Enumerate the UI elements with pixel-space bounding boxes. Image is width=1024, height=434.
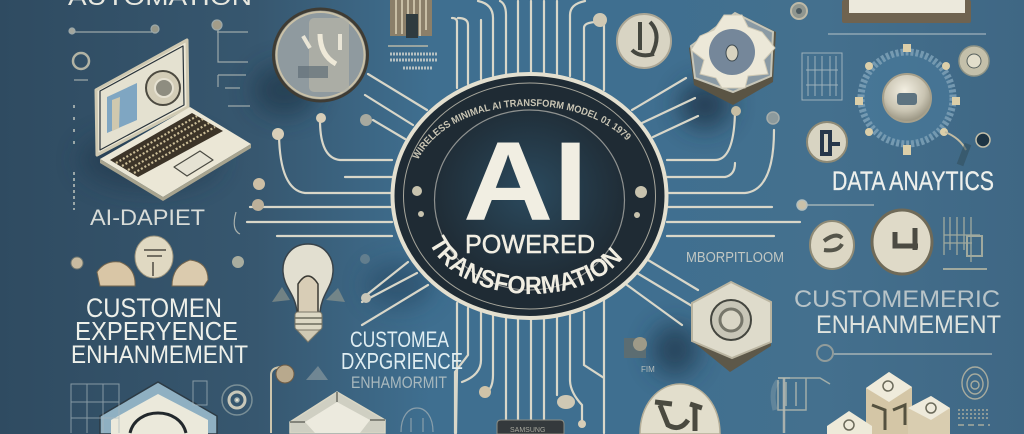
label: mborpitloom: MBORPITLOOM (686, 249, 784, 266)
icon: top seal (617, 14, 671, 68)
icon: bottom left hexagon (100, 382, 217, 434)
icon: lower center sketch (401, 408, 433, 432)
icon: sketch panel (778, 378, 830, 410)
sketch connector right (767, 112, 874, 210)
icon: building sketch (388, 0, 438, 68)
text: customer experience left (71, 293, 248, 369)
icon: top right panel (842, 0, 971, 23)
icon: spiral emblem (958, 367, 990, 425)
icon: camera sketch (624, 337, 655, 374)
badge ring microtext: WIRELESS MINIMAL AI TRANSFORM MODEL 01 1979 (412, 99, 631, 158)
sketch marks near laptop (69, 20, 250, 210)
icon: laptop (96, 40, 251, 201)
icon: bottom seal (640, 384, 720, 434)
text: customer enhancement right (794, 286, 1001, 339)
icon: small ring left (222, 385, 252, 415)
line: customea: CUSTOMEA (350, 327, 449, 352)
heading: ai-driven: AI-DAPIET (90, 205, 205, 230)
icon: bottom center cube (290, 392, 385, 433)
icon: chip (497, 420, 564, 434)
icon: chip: SAMSUNG (510, 427, 545, 434)
powered label: POWERED (465, 229, 595, 259)
icon: clock dial (274, 9, 368, 101)
divider line and small knob (791, 3, 986, 34)
icon: hook connector (271, 365, 328, 433)
icon: grid sketch left (71, 381, 207, 433)
icon: small circle right (810, 221, 854, 269)
icon: camera sketch: FIM (641, 365, 655, 374)
icon: circular data diagram (855, 44, 990, 165)
ai heading: AI (463, 119, 588, 244)
line: customen: CUSTOMEN (86, 293, 222, 323)
icon: data sketch (943, 217, 987, 269)
icon: small button (959, 46, 989, 76)
badge ring icons (412, 186, 647, 218)
central badge (390, 72, 668, 320)
text: customer experience middle (341, 327, 463, 392)
icon: stacked cubes (827, 372, 950, 434)
transformation label: TRANSFORMATION (432, 234, 622, 294)
line: dxpgrience: DXPGRIENCE (341, 348, 463, 374)
line: enhanmement: ENHANMEMENT (71, 341, 248, 369)
icon: light bulb (272, 244, 370, 342)
line: experyence: EXPERYENCE (75, 316, 238, 346)
line: enhamormit: ENHAMORMIT (351, 373, 447, 392)
soft shadows (80, 64, 731, 376)
icon: three lumps (71, 212, 244, 286)
line: enhanmement right: ENHANMEMENT (816, 311, 1001, 339)
icon: grid chart (802, 53, 842, 100)
icon: large circle right (872, 210, 932, 274)
line: customemeric: CUSTOMEMERIC (794, 286, 1000, 313)
sketch marks lower right (773, 345, 992, 433)
icon: gear hexagon (689, 12, 776, 116)
circuit traces (247, 1, 800, 433)
icon: hexagon badge right (692, 282, 771, 372)
icon: key button (807, 122, 847, 162)
